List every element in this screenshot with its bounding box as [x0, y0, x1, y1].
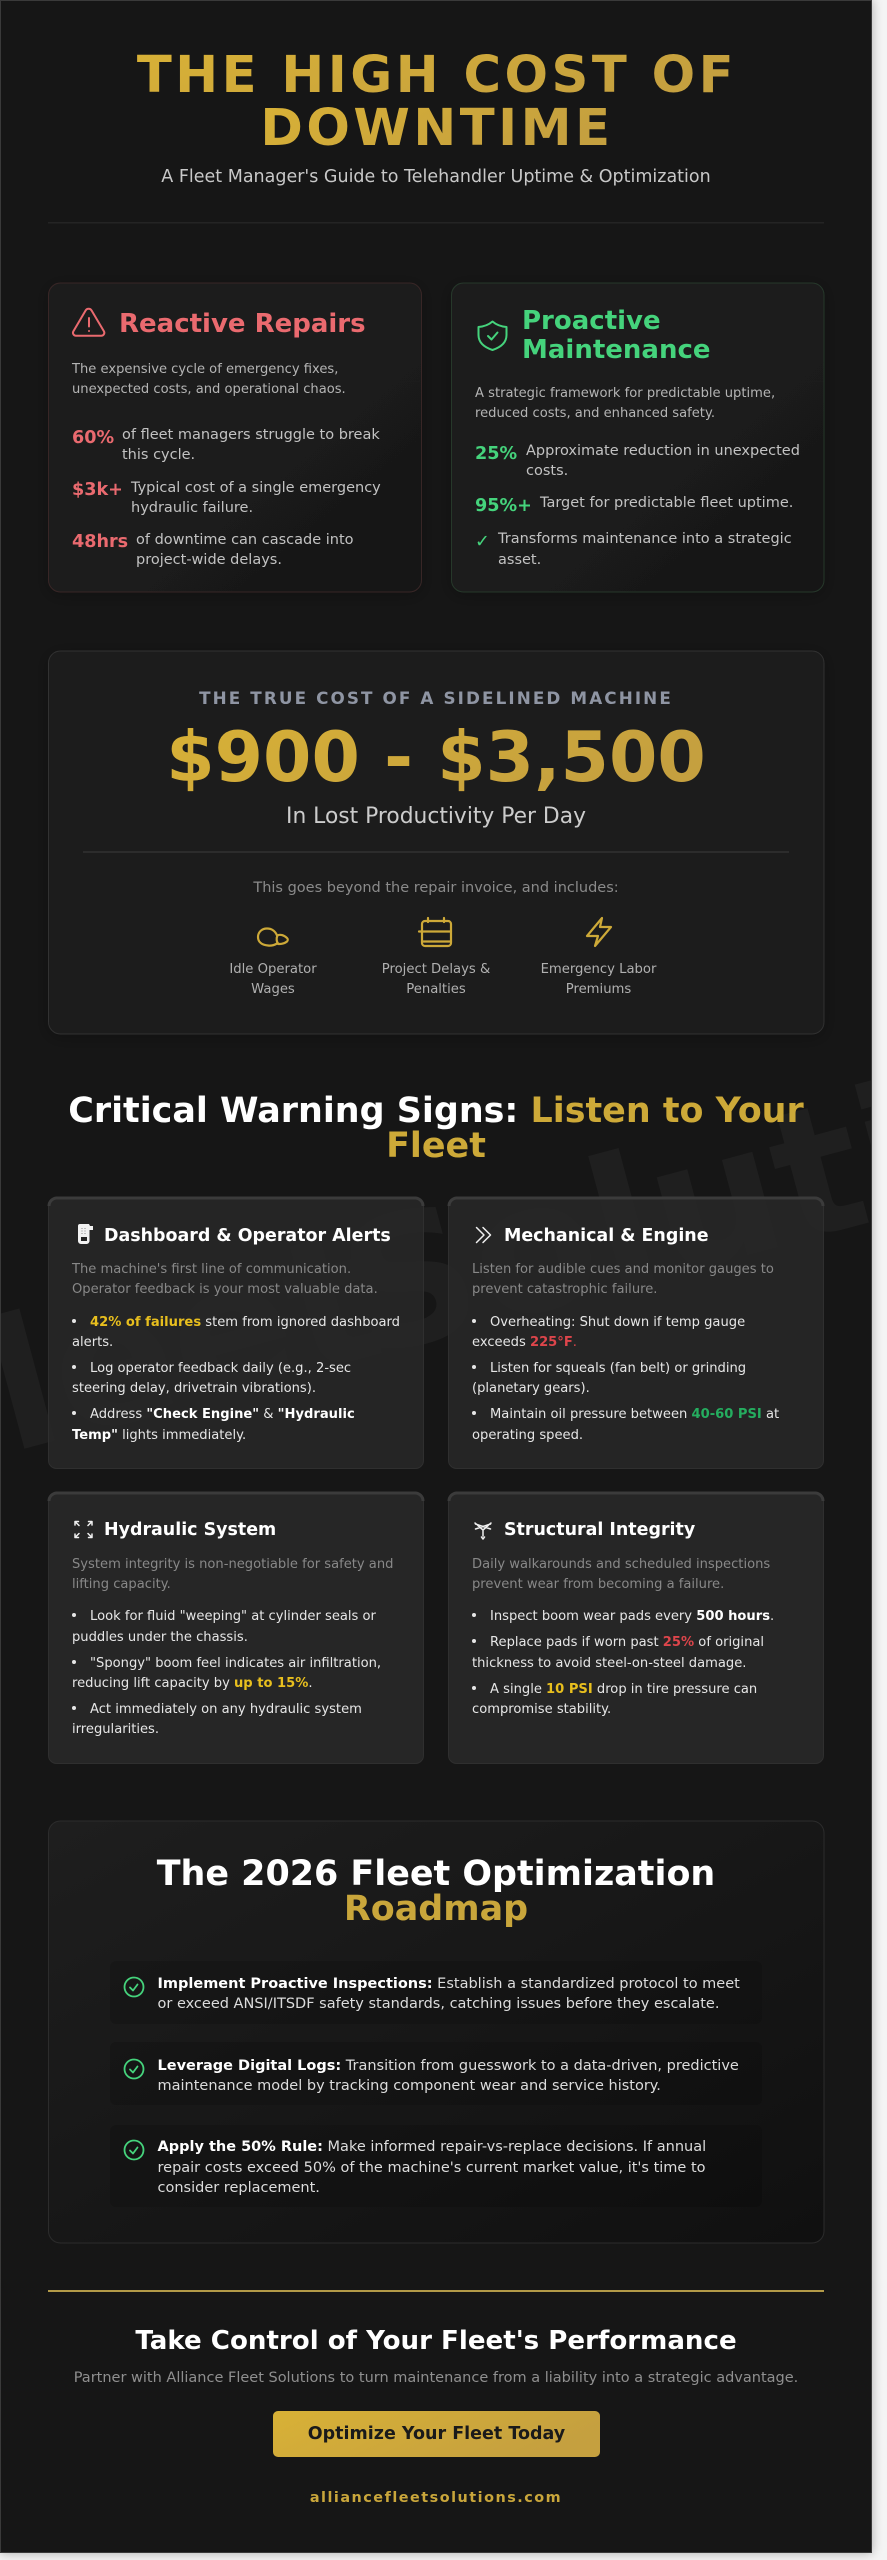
panel: structural integrity — [448, 1492, 824, 1764]
bullet list: Look for fluid "weeping" at cylinder seals or — [90, 1609, 377, 1624]
panel: hydraulic system — [48, 1492, 424, 1764]
bullet list — [72, 1609, 381, 1737]
card title: Structural Integrity — [504, 1520, 696, 1540]
stat: check: Transforms maintenance into a strategic — [497, 531, 792, 547]
bullet list: operating speed. — [472, 1428, 583, 1443]
lead-in text: This goes beyond the repair invoice, and includes: — [252, 880, 619, 896]
bullet list: "Spongy" boom feel indicates air infiltration, — [90, 1656, 381, 1671]
stat: 60% — [72, 427, 380, 463]
card description — [71, 1262, 378, 1297]
panel: reactive repairs — [48, 283, 422, 592]
bullet list: alerts. — [72, 1335, 113, 1350]
panel: dashboard and operator alerts — [48, 1198, 424, 1468]
item: idle operator wages — [229, 928, 317, 997]
title: THE HIGH COST OF — [137, 45, 737, 105]
item: idle operator wages: Idle Operator — [229, 962, 317, 977]
bullet list: (planetary gears). — [472, 1381, 590, 1396]
bullet list: steering delay, drivetrain vibrations). — [72, 1381, 316, 1396]
button — [273, 2411, 600, 2457]
bullet list — [72, 1315, 400, 1443]
step 1: Implement Proactive Inspections: Establish a standardized protocol to meet — [158, 1976, 740, 1992]
heading: critical warning signs: Fleet — [386, 1126, 486, 1166]
bullet list — [472, 1609, 774, 1717]
bullet list: Listen for squeals (fan belt) or grinding — [490, 1361, 746, 1376]
step 3 — [110, 2125, 762, 2207]
description: reduced costs, and enhanced safety. — [475, 406, 715, 421]
description: A strategic framework for predictable uptime, — [475, 386, 775, 401]
website: alliancefleetsolutions.com — [310, 2490, 562, 2506]
step 2: maintenance model by tracking component wear and service history. — [158, 2078, 661, 2094]
card description: The machine's first line of communication. — [71, 1262, 351, 1277]
stat: 60%: this cycle. — [122, 447, 195, 463]
heading: Reactive Repairs — [119, 309, 366, 339]
item: emergency labor: Emergency Labor — [541, 962, 657, 977]
card title: Hydraulic System — [104, 1520, 276, 1540]
bullet list: reducing lift capacity by up to 15%. — [72, 1676, 313, 1691]
card title: Dashboard & Operator Alerts — [104, 1226, 391, 1246]
footer call to action — [74, 2326, 798, 2506]
stat: 95%+: Target for predictable fleet uptime. — [539, 495, 793, 511]
step 2: Leverage Digital Logs: Transition from guesswork to a data-driven, predictive — [158, 2058, 739, 2074]
button: Optimize Your Fleet Today — [308, 2424, 566, 2444]
title — [137, 45, 737, 158]
stat: check: ✓ — [475, 532, 490, 552]
bullet list: Maintain oil pressure between 40-60 PSI at — [490, 1407, 779, 1422]
bullet list: puddles under the chassis. — [72, 1630, 248, 1645]
stat: $3k+: hydraulic failure. — [131, 500, 253, 516]
item: project delays: Penalties — [406, 982, 466, 997]
stat: 25%: Approximate reduction in unexpected — [526, 443, 800, 459]
bullet list: exceeds 225°F. — [472, 1335, 577, 1350]
icon: double chevron — [476, 1228, 490, 1242]
text: Partner with Alliance Fleet Solutions to turn maintenance from a liability into a strategic advantage. — [74, 2370, 798, 2386]
description: The expensive cycle of emergency fixes, — [71, 362, 338, 377]
card description: prevent catastrophic failure. — [472, 1282, 657, 1297]
heading — [157, 1854, 715, 1929]
item: emergency labor: Premiums — [566, 982, 631, 997]
heading: critical warning signs — [68, 1091, 805, 1166]
big number: $900 - $3,500 — [166, 717, 706, 798]
icon: lightning bolt — [587, 918, 611, 946]
stat: 25% — [475, 443, 800, 479]
item: project delays — [382, 918, 490, 997]
icon: expanding arrows — [75, 1522, 92, 1538]
item: project delays: Project Delays & — [382, 962, 490, 977]
stat: 60%: 60% — [72, 428, 114, 448]
icon: check circle — [124, 2060, 144, 2078]
bullet list: 42% of failures stem from ignored dashboard — [90, 1315, 400, 1330]
bullet list: Address "Check Engine" & "Hydraulic — [90, 1407, 355, 1422]
heading: The 2026 Fleet Optimization — [157, 1854, 715, 1894]
bullet list: compromise stability. — [472, 1702, 611, 1717]
card description: prevent wear from becoming a failure. — [472, 1577, 724, 1592]
heading: Proactive — [522, 306, 661, 336]
icon: check circle — [124, 2140, 144, 2160]
subtitle: A Fleet Manager's Guide to Telehandler Uptime & Optimization — [161, 167, 711, 187]
step 1: or exceed ANSI/ITSDF safety standards, catching issues before they escalate. — [158, 1996, 719, 2012]
stat: 48hrs: of downtime can cascade into — [136, 532, 354, 548]
description — [475, 386, 775, 421]
card description: Operator feedback is your most valuable data. — [72, 1282, 378, 1297]
stat: 60%: of fleet managers struggle to break — [122, 427, 380, 443]
icon: structural arrows — [475, 1523, 491, 1539]
card description — [472, 1262, 774, 1297]
step 1 — [110, 1961, 762, 2024]
sub label: In Lost Productivity Per Day — [286, 804, 586, 829]
step 3: Apply the 50% Rule: Make informed repair-vs-replace decisions. If annual — [158, 2139, 706, 2155]
card description: Listen for audible cues and monitor gauges to — [472, 1262, 774, 1277]
icon: warning triangle — [73, 309, 104, 336]
step 3: consider replacement. — [158, 2180, 320, 2196]
label: THE TRUE COST OF A SIDELINED MACHINE — [199, 688, 673, 708]
card description — [72, 1557, 393, 1592]
heading: Take Control of Your Fleet's Performance — [135, 2326, 737, 2356]
stat: check — [475, 531, 792, 568]
card description: System integrity is non-negotiable for safety and — [72, 1557, 393, 1572]
stat: 95%+: 95%+ — [475, 496, 532, 516]
panel: proactive maintenance — [452, 283, 824, 592]
step 2 — [110, 2042, 762, 2105]
stat: $3k+ — [72, 480, 381, 516]
heading — [522, 306, 711, 365]
bullet list: Overheating: Shut down if temp gauge — [490, 1315, 745, 1330]
panel: true cost — [48, 651, 824, 1034]
stat: 95%+ — [475, 495, 793, 516]
stat: 48hrs: project-wide delays. — [136, 552, 282, 568]
stat: 48hrs — [72, 532, 354, 568]
watermark: Fleet Solutions — [1, 1080, 871, 1448]
bullet list: Act immediately on any hydraulic system — [90, 1702, 362, 1717]
bullet list: Replace pads if worn past 25% of original — [490, 1635, 764, 1650]
item: idle operator wages: Wages — [251, 982, 295, 997]
title: DOWNTIME — [260, 98, 614, 158]
icon: shield check — [478, 322, 506, 350]
description: unexpected costs, and operational chaos. — [72, 382, 346, 397]
panel: roadmap — [48, 1821, 824, 2243]
card title: Mechanical & Engine — [504, 1226, 709, 1246]
stat: 25%: costs. — [526, 463, 568, 479]
stat: check: asset. — [498, 552, 541, 568]
step 3: repair costs exceed 50% of the machine's current market value, it's time to — [158, 2160, 706, 2176]
stat: $3k+: Typical cost of a single emergency — [130, 480, 381, 496]
bullet list — [472, 1315, 779, 1443]
heading: Maintenance — [522, 335, 711, 365]
bullet list: Log operator feedback daily (e.g., 2-sec — [90, 1361, 351, 1376]
item: emergency labor — [541, 918, 657, 997]
stat: $3k+: $3k+ — [72, 480, 123, 500]
card description: lifting capacity. — [72, 1577, 171, 1592]
bullet list: irregularities. — [72, 1722, 159, 1737]
description — [71, 362, 346, 397]
bullet list: Inspect boom wear pads every 500 hours. — [490, 1609, 774, 1624]
card description: Daily walkarounds and scheduled inspections — [472, 1557, 770, 1572]
bullet list: A single 10 PSI drop in tire pressure can — [490, 1682, 757, 1697]
icon: check circle — [124, 1978, 144, 1996]
card description — [472, 1557, 770, 1592]
stat: 25%: 25% — [475, 444, 517, 464]
stat: 48hrs: 48hrs — [72, 532, 128, 552]
icon: idle — [258, 928, 288, 946]
panel: mechanical and engine — [448, 1198, 824, 1468]
bullet list: Temp" lights immediately. — [72, 1428, 246, 1443]
heading: Roadmap — [344, 1889, 528, 1929]
header — [137, 45, 737, 187]
heading: critical warning signs: Critical Warning Signs: Listen to Your — [68, 1091, 805, 1131]
icon: dashboard device — [78, 1224, 93, 1244]
bullet list: thickness to avoid steel-on-steel damage. — [472, 1656, 746, 1671]
icon: calendar — [419, 918, 451, 946]
